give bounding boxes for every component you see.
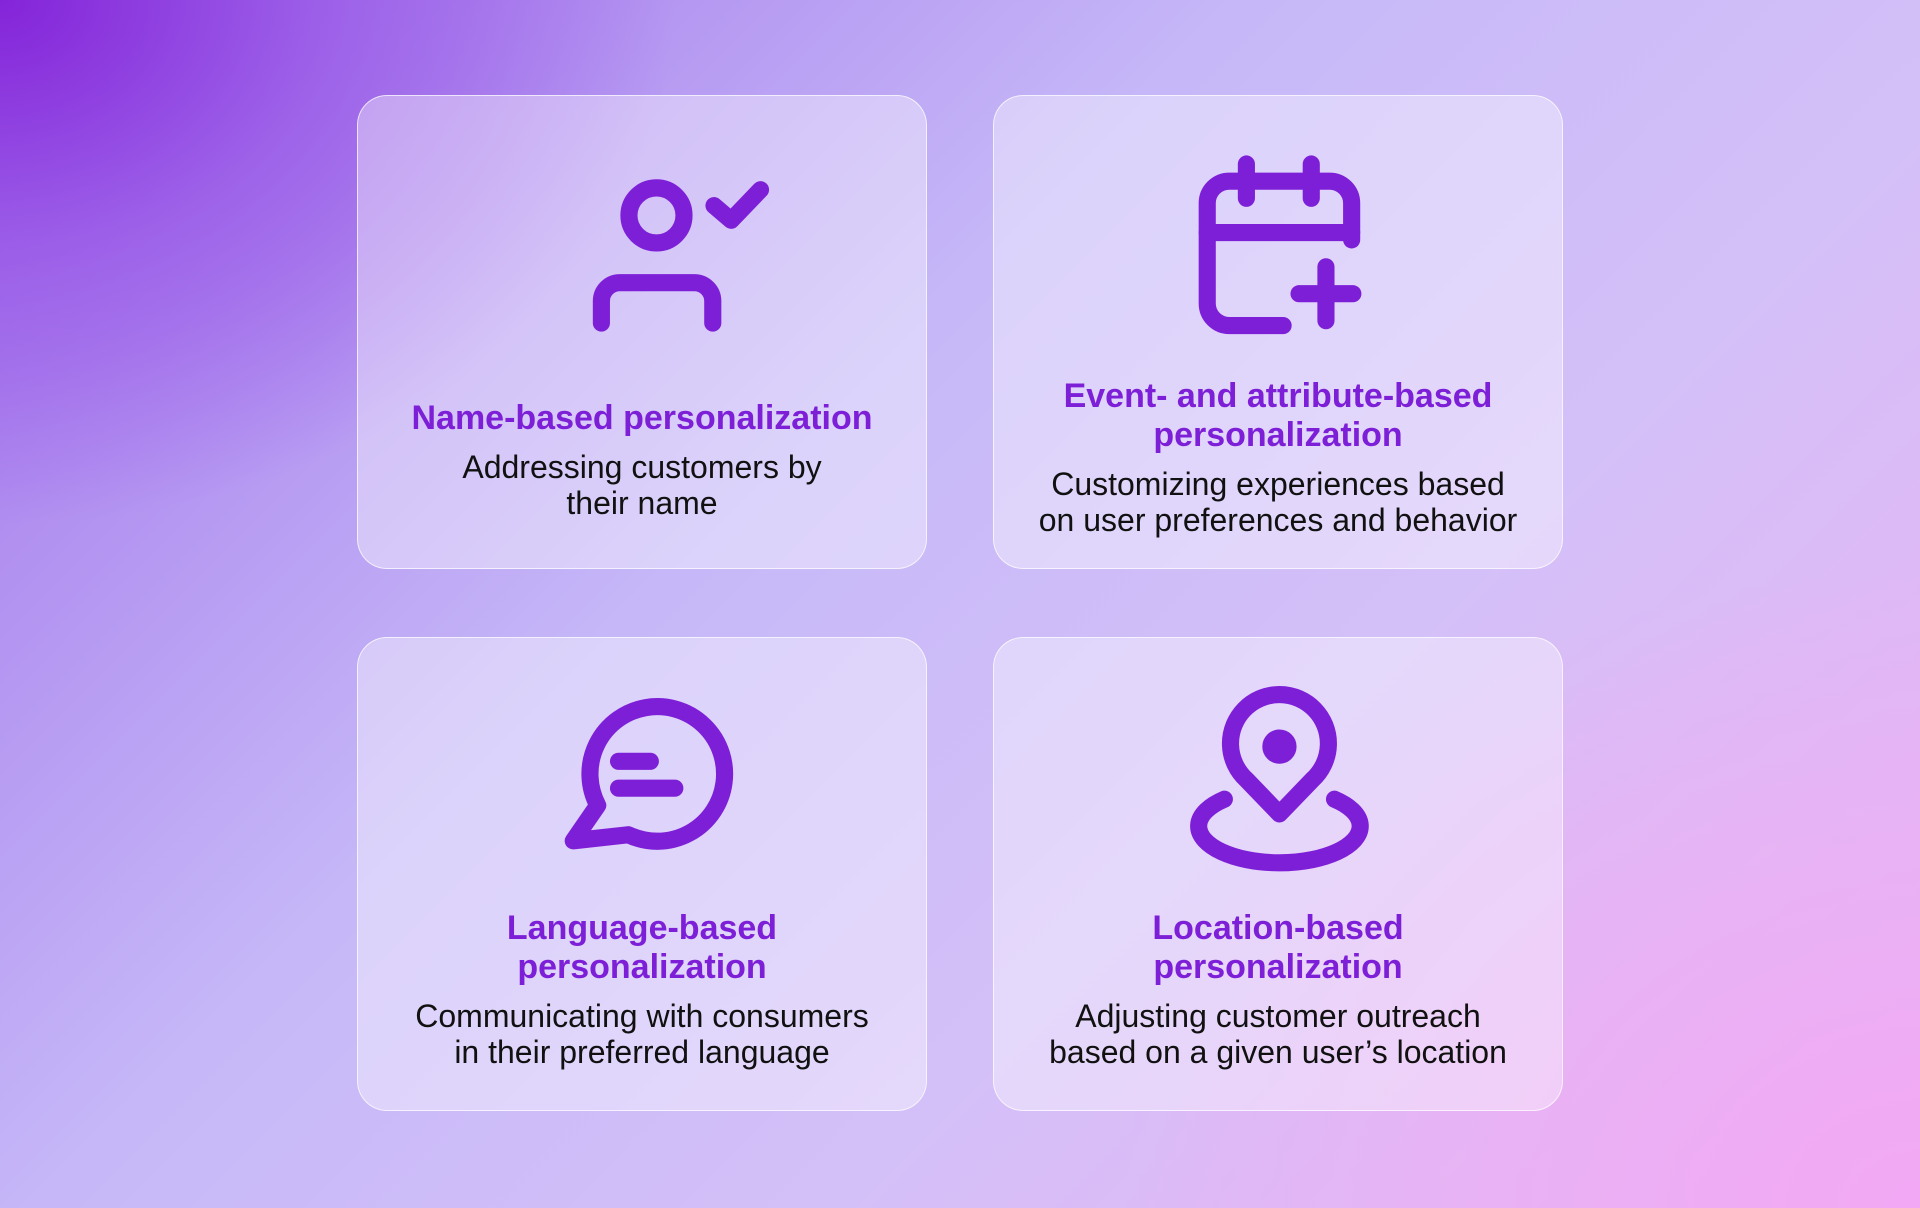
card: location-based [993,637,1563,1111]
text: location-based: Adjusting customer outreach [1075,998,1481,1034]
text: event-based: Customizing experiences based [1051,466,1505,502]
text: name-based: Name-based personalization [411,399,872,437]
icon: chat bubble [573,707,725,841]
text: event-based: on user preferences and behavior [1039,502,1517,538]
text: language-based: Communicating with consumers [415,998,869,1034]
text: location-based: Location-based [1152,909,1404,947]
text: location-based [1049,909,1507,1070]
card: name-based [357,95,927,569]
text: location-based: based on a given user’s location [1049,1034,1507,1070]
text: event-based: Event- and attribute-based [1064,377,1492,415]
icon: user check [601,188,761,323]
text: location-based: personalization [1153,948,1403,986]
text: language-based: in their preferred language [454,1034,830,1070]
card: event-based [993,95,1563,569]
text: name-based [411,399,872,521]
text: language-based: Language-based [507,909,777,947]
text: event-based [1039,377,1517,538]
text: name-based: their name [566,485,718,521]
text: language-based: personalization [517,948,767,986]
icon: calendar plus [1207,164,1353,326]
icon: location pin [1199,695,1360,863]
text: name-based: Addressing customers by [462,449,822,485]
text: language-based [415,909,869,1070]
card: language-based [357,637,927,1111]
text: event-based: personalization [1153,416,1403,454]
